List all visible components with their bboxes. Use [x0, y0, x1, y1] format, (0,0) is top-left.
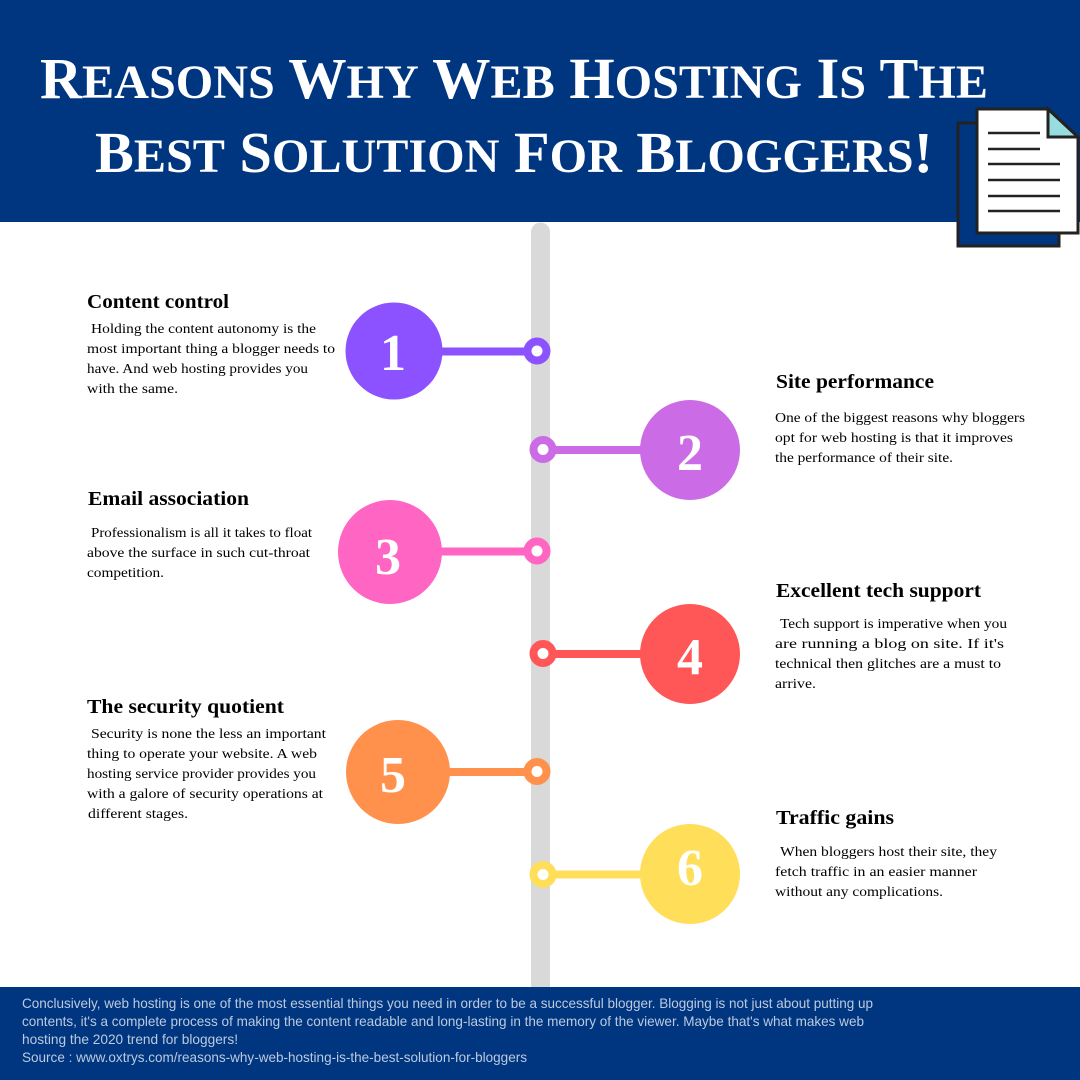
title: BEST SOLUTION FOR BLOGGERS! [95, 120, 933, 185]
item 4: excellent tech support: are running a blog on site. If it's [775, 637, 1004, 652]
item 6: traffic gains: fetch traffic in an easier manner [775, 865, 977, 880]
item 1: content control: most important thing a blogger needs to [87, 342, 335, 357]
item 1: content control: Holding the content autonomy is the [91, 322, 316, 337]
item 3: email association [87, 488, 546, 604]
item 3: email association: Email association [88, 488, 249, 510]
item 4: excellent tech support: Tech support is imperative when you [780, 617, 1007, 632]
item 3: email association: Professionalism is all it takes to float [91, 526, 312, 541]
item 1: content control [87, 291, 546, 400]
item 4: excellent tech support: technical then glitches are a must to [775, 657, 1001, 672]
item 1: content control: 1 [380, 325, 406, 382]
item 2: site performance: the performance of their site. [775, 451, 953, 466]
item 1: content control: have. And web hosting provides you [87, 362, 308, 377]
footer band [0, 987, 1080, 1080]
item 1: content control: with the same. [87, 382, 178, 397]
item 5: the security quotient: different stages. [88, 807, 188, 822]
item 5: the security quotient: thing to operate your website. A web [87, 747, 317, 762]
item 6: traffic gains: 6 [677, 840, 703, 897]
item 2: site performance [534, 371, 1025, 500]
item 6: traffic gains: When bloggers host their site, they [780, 845, 997, 860]
item 5: the security quotient: with a galore of security operations at [87, 787, 323, 802]
icon: documents [958, 109, 1078, 246]
item 3: email association: above the surface in such cut-throat [87, 546, 310, 561]
item 6: traffic gains [534, 807, 997, 924]
item 4: excellent tech support: 4 [677, 629, 703, 686]
item 4: excellent tech support: Excellent tech support [776, 580, 981, 602]
item 2: site performance: 2 [677, 425, 703, 482]
title [40, 46, 988, 185]
item 6: traffic gains: Traffic gains [776, 807, 894, 829]
item 5: the security quotient [87, 696, 546, 824]
footer text [22, 995, 873, 1065]
item 5: the security quotient: The security quotient [87, 696, 284, 718]
item 6: traffic gains: without any complications. [775, 885, 943, 900]
footer text: hosting the 2020 trend for bloggers! [22, 1031, 238, 1047]
item 2: site performance: Site performance [776, 371, 934, 393]
footer text: Source : www.oxtrys.com/reasons-why-web-hosting-is-the-best-solution-for-bloggers [22, 1049, 527, 1065]
timeline bar [531, 222, 550, 987]
footer text: contents, it's a complete process of making the content readable and long-lasting in the memory of the viewer. Maybe that's what makes web [22, 1013, 864, 1029]
footer text: Conclusively, web hosting is one of the most essential things you need in order to be a successful blogger. Blogging is not just about putting up [22, 995, 873, 1011]
item 2: site performance: opt for web hosting is that it improves [775, 431, 1013, 446]
item 4: excellent tech support: arrive. [775, 677, 816, 692]
item 3: email association: 3 [375, 529, 401, 586]
item 4: excellent tech support [534, 580, 1007, 704]
item 2: site performance: One of the biggest reasons why bloggers [775, 411, 1025, 426]
item 5: the security quotient: Security is none the less an important [91, 727, 326, 742]
item 5: the security quotient: 5 [380, 747, 406, 804]
header band [0, 0, 1080, 222]
item 5: the security quotient: hosting service provider provides you [87, 767, 316, 782]
title: REASONS WHY WEB HOSTING IS THE [40, 46, 988, 111]
item 3: email association: competition. [87, 566, 164, 581]
item 1: content control: Content control [87, 291, 229, 313]
